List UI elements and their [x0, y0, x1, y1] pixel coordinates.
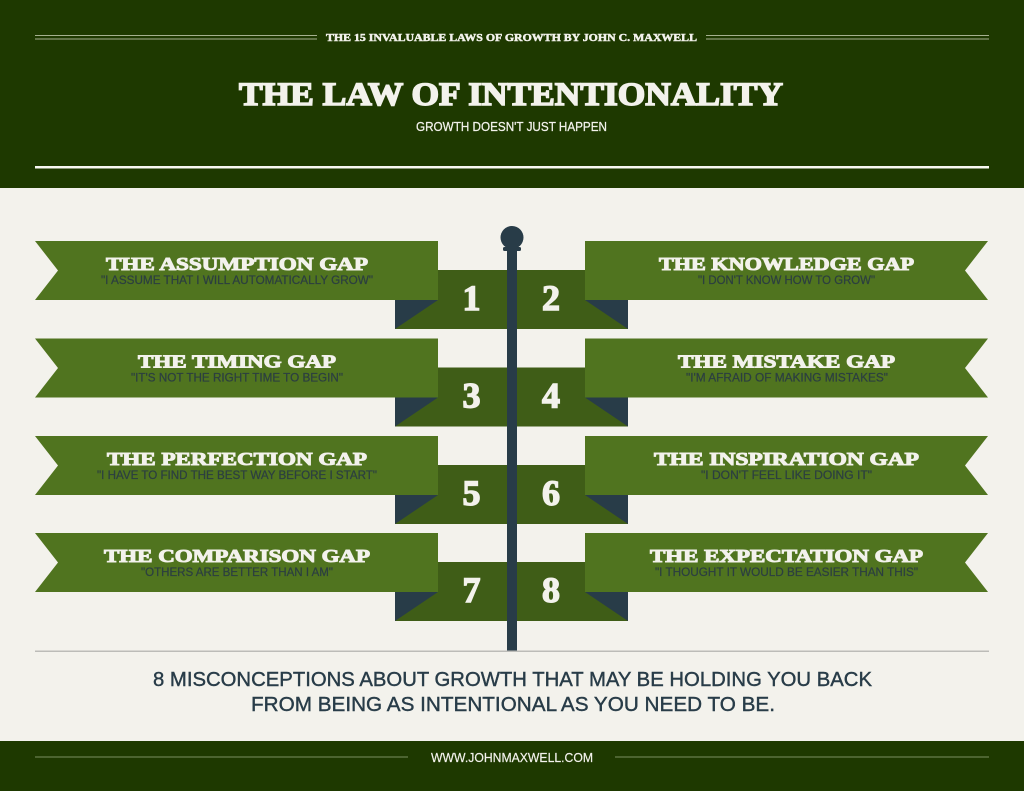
banner: the comparison gap: THE COMPARISON GAP	[104, 546, 370, 566]
banner: the expectation gap: "I THOUGHT IT WOULD BE EASIER THAN THIS"	[655, 565, 918, 579]
banner: the expectation gap	[585, 533, 988, 592]
banner: the timing gap: THE TIMING GAP	[138, 352, 336, 372]
banner: the expectation gap: THE EXPECTATION GAP	[650, 546, 923, 566]
banner: the perfection gap: THE PERFECTION GAP	[107, 449, 367, 469]
banner: the assumption gap: "I ASSUME THAT I WILL AUTOMATICALLY GROW"	[101, 273, 373, 287]
banner: the knowledge gap: "I DON'T KNOW HOW TO GROW"	[698, 273, 875, 287]
banner: the inspiration gap: THE INSPIRATION GAP	[654, 449, 919, 469]
number 6: 6	[542, 473, 560, 513]
banner: the timing gap: "IT'S NOT THE RIGHT TIME TO BEGIN"	[131, 370, 343, 384]
banner: the comparison gap: "OTHERS ARE BETTER THAN I AM"	[141, 565, 333, 579]
closing statement	[153, 669, 873, 716]
number 7: 7	[462, 570, 480, 610]
website: WWW.JOHNMAXWELL.COM	[431, 750, 593, 765]
number 5: 5	[462, 473, 480, 513]
banner: the mistake gap: "I'M AFRAID OF MAKING MISTAKES"	[686, 370, 888, 384]
number 3: 3	[462, 376, 480, 416]
series heading: THE 15 INVALUABLE LAWS OF GROWTH BY JOHN C. MAXWELL	[326, 33, 697, 44]
banner: the inspiration gap	[585, 436, 988, 495]
ribbon fold shadows	[395, 300, 628, 621]
title: THE LAW OF INTENTIONALITY	[239, 77, 783, 113]
banner: the perfection gap: "I HAVE TO FIND THE BEST WAY BEFORE I START"	[97, 468, 377, 482]
header panel	[0, 0, 1024, 188]
banner: the mistake gap: THE MISTAKE GAP	[678, 352, 895, 372]
dark ribbon bands behind numbers	[395, 270, 628, 621]
banner: the mistake gap	[585, 338, 988, 398]
subtitle: GROWTH DOESN'T JUST HAPPEN	[416, 120, 607, 134]
number 4: 4	[542, 376, 560, 416]
flag pole	[500, 226, 524, 651]
footer panel	[0, 741, 1024, 791]
banner: the knowledge gap	[585, 241, 988, 300]
closing statement: FROM BEING AS INTENTIONAL AS YOU NEED TO BE.	[251, 694, 775, 716]
banner: the perfection gap	[35, 436, 438, 495]
number 1: 1	[462, 278, 480, 318]
banner: the knowledge gap: THE KNOWLEDGE GAP	[659, 254, 914, 274]
closing statement: 8 MISCONCEPTIONS ABOUT GROWTH THAT MAY BE HOLDING YOU BACK	[153, 669, 873, 691]
banner: the inspiration gap: "I DON'T FEEL LIKE DOING IT"	[701, 468, 872, 482]
banner: the timing gap	[35, 338, 438, 398]
number 2: 2	[542, 278, 560, 318]
banner: the comparison gap	[35, 533, 438, 592]
banner: the assumption gap	[35, 241, 438, 300]
number 8: 8	[542, 570, 560, 610]
banner: the assumption gap: THE ASSUMPTION GAP	[106, 254, 368, 274]
